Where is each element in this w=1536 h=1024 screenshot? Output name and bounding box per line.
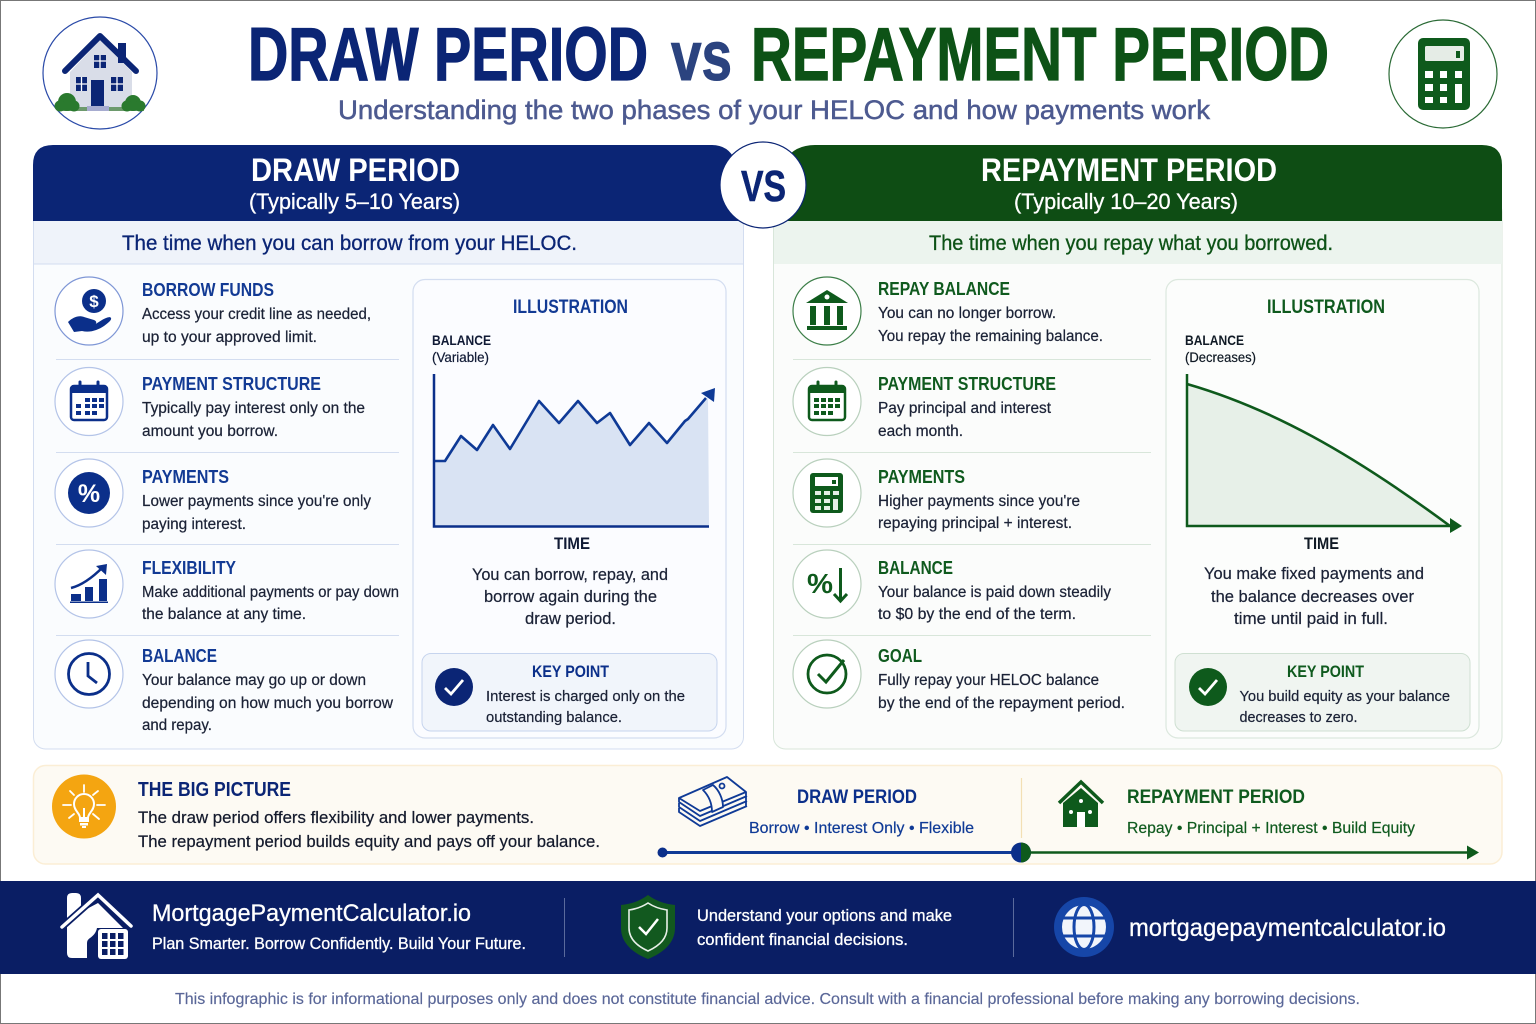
draw period summary: DRAW PERIOD — [797, 787, 917, 808]
big picture text: The repayment period builds equity and pays off your balance. — [138, 833, 600, 851]
tagline: Understand your options and make — [697, 907, 952, 925]
draw period summary: Borrow • Interest Only • Flexible — [749, 820, 974, 837]
item: goal: by the end of the repayment period. — [878, 695, 1125, 712]
item: payments: paying interest. — [142, 516, 246, 533]
card: repayment illustration: time until paid in full. — [1234, 610, 1388, 628]
timeline arrow — [658, 842, 1479, 862]
chart: variable balance: TIME — [554, 534, 590, 553]
panel: the big picture — [34, 766, 1502, 864]
item: balance: BALANCE — [878, 558, 953, 578]
item: payment structure — [55, 368, 365, 440]
tagline — [697, 907, 952, 949]
big picture text: The draw period offers flexibility and lower payments. — [138, 809, 534, 827]
card: draw illustration: BALANCE — [432, 332, 491, 348]
item: payments: Lower payments since you're only — [142, 493, 371, 510]
tagline: confident financial decisions. — [697, 931, 908, 949]
callout: repayment key point: decreases to zero. — [1240, 709, 1358, 726]
item: repay balance: You repay the remaining balance. — [878, 328, 1103, 345]
item: balance: Your balance is paid down steadily — [878, 584, 1111, 601]
card: draw illustration: (Variable) — [432, 349, 489, 365]
item: flexibility: the balance at any time. — [142, 606, 306, 623]
chart: decreasing balance: TIME — [1304, 534, 1339, 553]
card: draw illustration — [413, 280, 726, 738]
repayment period header — [773, 145, 1502, 221]
item: repay balance — [793, 277, 1103, 345]
item: flexibility: Make additional payments or pay down — [142, 584, 399, 601]
item: flexibility: FLEXIBILITY — [142, 558, 236, 578]
icon: light bulb — [52, 774, 116, 838]
card: draw illustration: ILLUSTRATION — [513, 297, 628, 318]
item: payment structure — [793, 368, 1056, 440]
item: balance — [793, 550, 1111, 623]
repayment period header: REPAYMENT PERIOD — [981, 152, 1277, 188]
repayment period summary: REPAYMENT PERIOD — [1127, 787, 1305, 808]
item: payment structure: PAYMENT STRUCTURE — [142, 374, 321, 394]
title: DRAW PERIOD — [248, 12, 648, 96]
icon: shield — [621, 895, 675, 959]
icon: house badge — [43, 17, 157, 129]
icon: calculator badge — [1389, 20, 1497, 128]
draw period header: (Typically 5–10 Years) — [249, 189, 460, 214]
card: repayment illustration: BALANCE — [1185, 332, 1244, 348]
item: payments: repaying principal + interest. — [878, 515, 1072, 532]
item: balance: depending on how much you borrow — [142, 695, 394, 712]
item: balance: Your balance may go up or down — [142, 672, 366, 689]
item: payments: PAYMENTS — [142, 467, 229, 487]
icon: cash stack — [679, 777, 747, 826]
big picture text: THE BIG PICTURE — [138, 779, 291, 801]
item: payment structure: each month. — [878, 423, 963, 440]
repayment period summary — [1127, 787, 1415, 837]
chart: decreasing balance — [1187, 374, 1462, 553]
item: balance: to $0 by the end of the term. — [878, 606, 1076, 623]
card: repayment illustration: (Decreases) — [1185, 349, 1256, 365]
card: repayment illustration: ILLUSTRATION — [1267, 297, 1385, 318]
item: goal: Fully repay your HELOC balance — [878, 672, 1099, 689]
item: goal — [793, 640, 1125, 712]
item: balance — [55, 640, 394, 734]
callout: draw key point — [422, 654, 717, 731]
card: repayment illustration — [1166, 280, 1479, 738]
item: flexibility — [55, 550, 399, 623]
item: borrow funds: $ — [89, 292, 99, 311]
repayment period definition: The time when you repay what you borrowed. — [929, 232, 1333, 255]
repayment period header: (Typically 10–20 Years) — [1014, 189, 1238, 214]
item: payment structure: Pay principal and interest — [878, 400, 1052, 417]
draw period definition: The time when you can borrow from your HELOC. — [122, 232, 577, 255]
callout: draw key point: Interest is charged only on the — [486, 688, 685, 705]
item: payments: PAYMENTS — [878, 467, 965, 487]
callout: repayment key point — [1175, 654, 1470, 731]
item: borrow funds — [55, 277, 371, 346]
item: borrow funds: BORROW FUNDS — [142, 280, 274, 300]
subtitle: Understanding the two phases of your HELOC and how payments work — [338, 95, 1210, 125]
card: draw illustration: borrow again during the — [484, 588, 657, 606]
draw period definition — [34, 221, 743, 264]
repayment period definition — [774, 221, 1502, 264]
repayment period summary: Repay • Principal + Interest • Build Equity — [1127, 820, 1415, 837]
title: vs — [671, 17, 732, 95]
website: mortgagepaymentcalculator.io — [1129, 914, 1446, 942]
item: repay balance: REPAY BALANCE — [878, 279, 1010, 299]
footer band — [0, 881, 1536, 974]
callout: draw key point: KEY POINT — [532, 663, 609, 681]
icon: green house — [1059, 782, 1103, 827]
icon: globe — [1054, 897, 1114, 957]
draw period header: DRAW PERIOD — [251, 152, 460, 188]
icon: footer house — [62, 893, 131, 959]
item: payments — [55, 459, 371, 533]
draw period summary — [749, 787, 974, 837]
disclaimer: This infographic is for informational purposes only and does not constitute financial advice. Consult with a financial professional before making any borrowing decisions. — [175, 991, 1360, 1008]
item: goal: GOAL — [878, 646, 922, 666]
vs badge — [720, 142, 806, 228]
panel: repayment period — [773, 145, 1502, 749]
chart: variable balance — [434, 374, 715, 553]
item: borrow funds: up to your approved limit. — [142, 329, 317, 346]
brand text: MortgagePaymentCalculator.io — [152, 900, 471, 927]
brand text: Plan Smarter. Borrow Confidently. Build Your Future. — [152, 935, 526, 953]
card: repayment illustration: the balance decreases over — [1211, 588, 1415, 606]
card: draw illustration: draw period. — [525, 610, 616, 628]
item: payment structure: amount you borrow. — [142, 423, 278, 440]
callout: repayment key point: KEY POINT — [1287, 663, 1364, 681]
draw period header — [33, 145, 743, 221]
item: balance: % — [807, 568, 833, 599]
item: borrow funds: Access your credit line as needed, — [142, 306, 371, 323]
item: repay balance: You can no longer borrow. — [878, 305, 1056, 322]
item: payments: Higher payments since you're — [878, 493, 1080, 510]
callout: draw key point: outstanding balance. — [486, 709, 622, 726]
panel: draw period — [33, 145, 744, 749]
title: REPAYMENT PERIOD — [751, 12, 1329, 96]
item: payment structure: Typically pay interest only on the — [142, 400, 365, 417]
vs badge: VS — [741, 162, 786, 211]
brand text — [152, 900, 526, 953]
big picture text — [138, 779, 600, 851]
item: payments — [793, 459, 1080, 532]
card: repayment illustration: You make fixed payments and — [1204, 565, 1424, 583]
item: balance: and repay. — [142, 717, 212, 734]
item: balance: BALANCE — [142, 646, 217, 666]
item: payment structure: PAYMENT STRUCTURE — [878, 374, 1056, 394]
callout: repayment key point: You build equity as your balance — [1240, 688, 1450, 705]
card: draw illustration: You can borrow, repay, and — [472, 566, 668, 584]
item: payments: % — [78, 480, 100, 508]
title — [248, 12, 1329, 96]
